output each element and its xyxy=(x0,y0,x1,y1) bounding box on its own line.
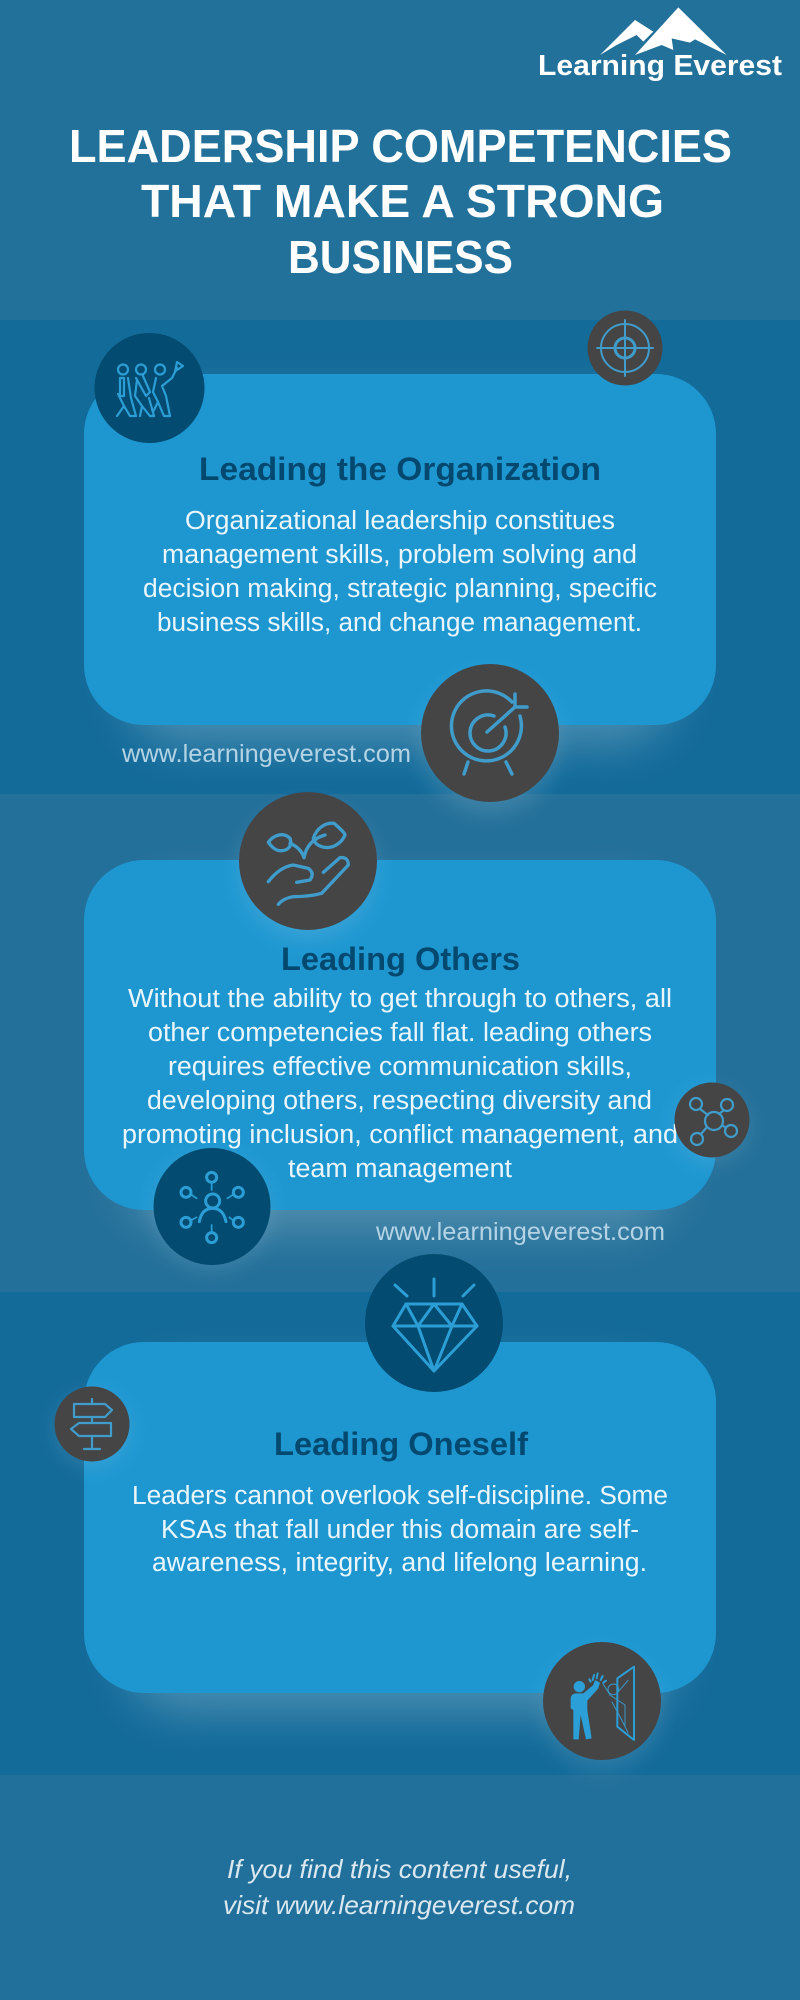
icon: diamond xyxy=(365,1254,503,1392)
body text xyxy=(132,1482,668,1577)
icon: person high-fiving mirror xyxy=(543,1642,661,1771)
closing call to action: visit www.learningeverest.com xyxy=(223,1890,575,1920)
body text: requires effective communication skills, xyxy=(168,1053,632,1081)
card xyxy=(84,374,716,725)
heading: Leading Oneself xyxy=(274,1426,528,1462)
card glow xyxy=(124,1368,676,1713)
title: BUSINESS xyxy=(288,231,513,283)
body text: KSAs that fall under this domain are self- xyxy=(161,1516,639,1544)
body text: Leaders cannot overlook self-discipline. Some xyxy=(132,1482,668,1510)
body text: Without the ability to get through to others, all xyxy=(128,985,672,1013)
body text: promoting inclusion, conflict management, and xyxy=(122,1121,678,1149)
icon: signpost xyxy=(54,1386,130,1468)
icon: mountains xyxy=(600,7,727,55)
body text: team management xyxy=(288,1155,512,1183)
heading: Leading Others xyxy=(281,941,520,977)
card xyxy=(84,1342,716,1693)
website watermark: www.learningeverest.com xyxy=(121,740,411,768)
body text: awareness, integrity, and lifelong learning. xyxy=(152,1549,647,1577)
closing call to action: If you find this content useful, xyxy=(227,1854,572,1884)
logo: Learning Everest xyxy=(538,7,782,82)
body text: management skills, problem solving and xyxy=(162,541,637,569)
website watermark: www.learningeverest.com xyxy=(375,1218,665,1246)
icon: archery target xyxy=(421,664,559,814)
title: THAT MAKE A STRONG xyxy=(141,175,664,227)
body text: other competencies fall flat. leading others xyxy=(148,1019,652,1047)
card xyxy=(84,860,716,1210)
icon: crosshair xyxy=(588,310,662,386)
title xyxy=(69,120,732,283)
icon: marching team with flag xyxy=(94,333,204,443)
body text: business skills, and change management. xyxy=(157,609,642,637)
card glow xyxy=(124,400,676,745)
heading: Leading the Organization xyxy=(199,451,601,487)
body text: developing others, respecting diversity and xyxy=(147,1087,652,1115)
panel: Leading Others xyxy=(84,860,716,1246)
body text xyxy=(122,985,678,1183)
panel: Leading Oneself xyxy=(84,1342,716,1713)
body text: decision making, strategic planning, specific xyxy=(143,575,657,603)
card glow xyxy=(124,886,676,1231)
icon: plant in hand xyxy=(239,792,377,941)
body text xyxy=(143,507,657,637)
body text: Organizational leadership constitues xyxy=(185,507,615,535)
closing call to action xyxy=(223,1854,575,1920)
icon: network nodes xyxy=(674,1082,750,1164)
logo wordmark: Learning Everest xyxy=(538,50,782,82)
icon: person with connections xyxy=(154,1148,270,1270)
panel: Leading the Organization xyxy=(84,374,716,768)
title: LEADERSHIP COMPETENCIES xyxy=(69,120,732,172)
